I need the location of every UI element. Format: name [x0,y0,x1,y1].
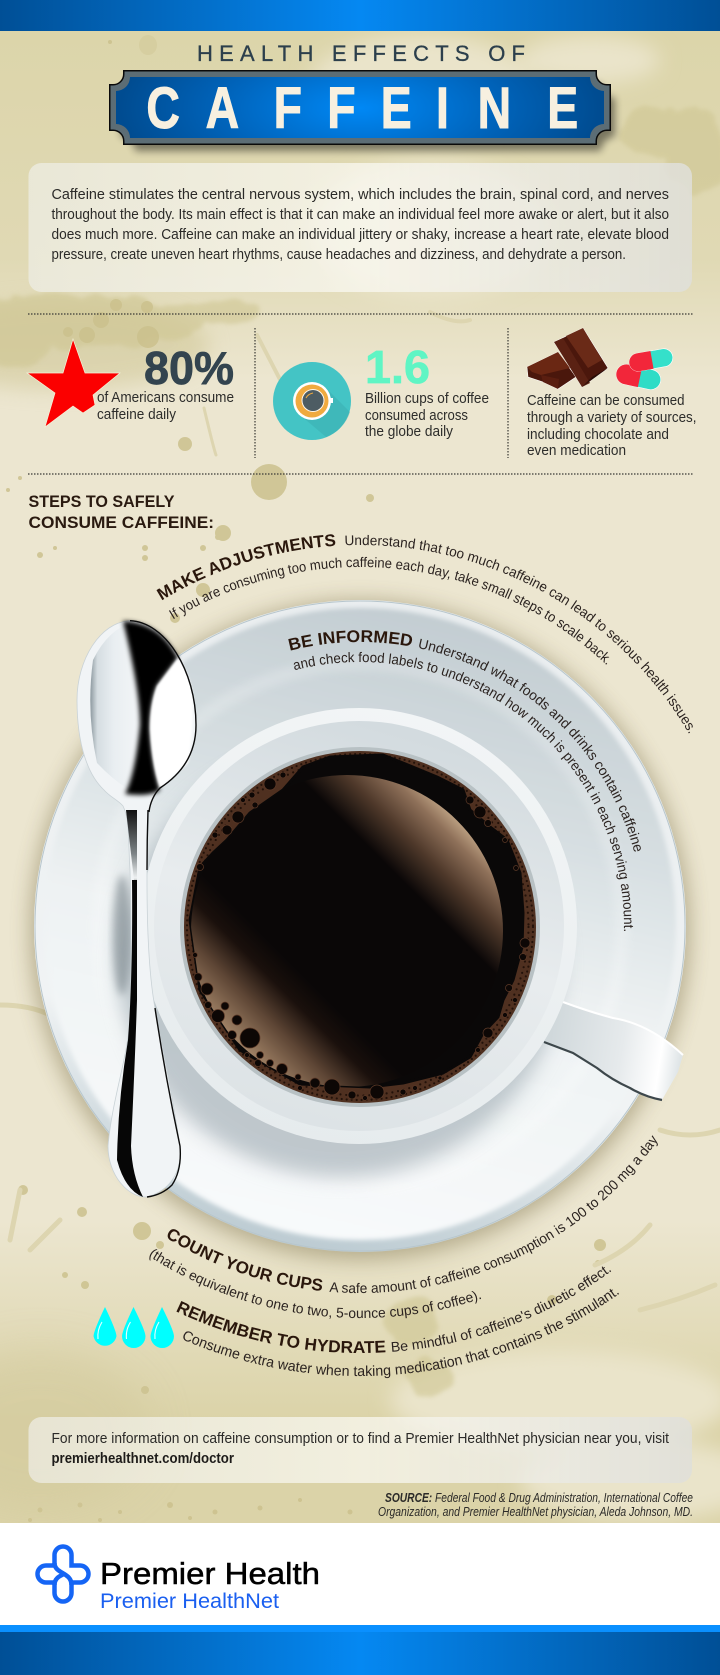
stat caption: Billion cups of coffee [365,390,489,407]
panel: more information: For more information on caffeine consumption or to find a Premier HealthNet physician near you, visit [52,1431,669,1447]
source note [378,1491,693,1519]
title: Health Effects of: HEALTH EFFECTS OF [197,41,525,66]
stat number: 80%: 80% [144,342,234,394]
step: make adjustments [156,534,693,734]
text: sources caption: including chocolate and [527,426,669,443]
text: sources caption: even medication [527,442,626,459]
stat: 80 percent [27,339,234,427]
body: line 2: and check food labels to understand how much is present in each serving amount. [294,652,634,931]
heading: make adjustments: MAKE ADJUSTMENTS [156,534,336,600]
body: line 2: Consume extra water when taking medication that contains the stimulant. [183,1288,619,1378]
text: sources caption: through a variety of sources, [527,409,696,426]
text: sources caption: Caffeine can be consumed [527,392,684,409]
panel: introduction: pressure, create uneven heart rhythms, cause headaches and dizziness, and dehydrate a person. [52,247,626,263]
icon: red star [27,339,120,427]
heading: steps [28,492,214,532]
stat number: 1.6: 1.6 [365,341,430,393]
panel: introduction: throughout the body. Its main effect is that it can make an individual feel more awake or alert, but it also [52,207,669,223]
saucer [30,600,690,1260]
spoon [77,621,196,1197]
coffee bubbles [192,772,530,1100]
footer white area [0,1523,720,1625]
panel: more information: premierhealthnet.com/doctor [52,1451,234,1467]
body: line 1: Understand what foods and drinks contain caffeine [419,638,641,852]
top blue bar [0,0,720,31]
bottom blue bar [0,1625,720,1675]
heading: steps: CONSUME CAFFEINE: [28,513,214,532]
stat caption [365,390,489,440]
logo subtitle: Premier HealthNet [100,1590,279,1613]
stat caption: caffeine daily [97,406,176,423]
panel: introduction: does much more. Caffeine can make an individual jittery or shaky, increase a heart rate, elevate blood [52,227,669,243]
heading: steps: STEPS TO SAFELY [28,492,175,511]
coffee foam ring [184,751,536,1103]
body: line 2: (that is equivalent to one to two, 5-ounce cups of coffee). [149,1249,481,1319]
body: line 1: Be mindful of caffeine's diuretic effect. [392,1266,612,1352]
body: line 1: Understand that too much caffeine can lead to serious health issues. [345,534,693,734]
logo mark [38,1546,88,1602]
heading: remember to hydrate: REMEMBER TO HYDRATE [176,1301,386,1353]
cup handle [543,1002,683,1100]
panel: more information [28,1417,692,1483]
panel: introduction: Caffeine stimulates the central nervous system, which includes the brain, spinal cord, and nerves [52,187,669,203]
coffee surface [190,755,523,1087]
icon: capsules [614,347,674,391]
stat caption: consumed across [365,407,468,424]
logo: Premier Health [38,1546,320,1613]
step: count your cups [149,1135,658,1319]
stat caption: of Americans consume [97,389,234,406]
text: sources caption [527,392,696,459]
coffee cup [141,708,577,1144]
heading: be informed: BE INFORMED [288,630,412,650]
icon: chocolate [527,328,608,389]
icon: coffee cup on teal disc [273,362,351,440]
heading: count your cups: COUNT YOUR CUPS [168,1229,322,1291]
stat: 1.6 billion cups [273,341,489,440]
panel: introduction [28,163,692,292]
stat caption [97,389,234,423]
title banner: Caffeine: CAFFEINE [146,76,578,141]
body: line 2: If you are consuming too much caffeine each day, take small steps to scale back. [169,556,610,665]
stat: other caffeine sources [527,328,696,459]
step: be informed [288,630,641,931]
body: line 1: A safe amount of caffeine consumption is 100 to 200 mg a day [329,1135,658,1294]
stat caption: the globe daily [365,423,453,440]
step: remember to hydrate [176,1266,619,1378]
logo wordmark: Premier Health [100,1556,320,1591]
icon: water drops [94,1307,174,1348]
